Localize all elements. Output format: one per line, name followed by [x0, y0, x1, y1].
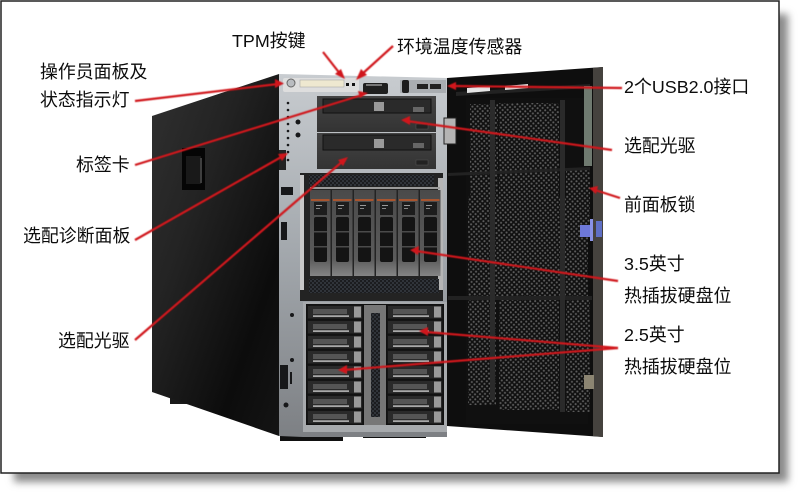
label: optional diagnostics panel: 选配诊断面板 [23, 226, 130, 246]
label: 3.5 inch hot-swap bays: 3.5英寸 [624, 254, 685, 274]
red callout arrows [135, 46, 622, 374]
label: 2.5 inch hot-swap bays: 2.5英寸 [624, 325, 685, 345]
label: 2.5 inch hot-swap bays: 热插拔硬盘位 [624, 357, 731, 377]
lower door hinge [584, 375, 594, 389]
arrow: diagnostic panel [135, 153, 288, 240]
feet [170, 392, 426, 441]
label: label card: 标签卡 [76, 155, 130, 175]
arrow: door lock [589, 186, 620, 198]
USB ports [400, 80, 446, 93]
arrow: left optical drive [135, 157, 348, 340]
side panel [152, 74, 279, 436]
arrow: ambient sensor [356, 46, 393, 80]
door hinge [444, 118, 456, 144]
silver front frame [279, 74, 447, 437]
operator panel [283, 78, 359, 92]
label card [363, 83, 388, 94]
arrow: label card [135, 91, 368, 165]
label: operator panel and status LEDs: 操作员面板及 [40, 62, 147, 82]
door connector strip [584, 86, 592, 166]
label: 3.5 inch hot-swap bays: 热插拔硬盘位 [624, 286, 731, 306]
3.5 inch drive bay [300, 173, 443, 301]
label: optional optical drive left: 选配光驱 [58, 331, 130, 351]
arrow: 2.5 inch bay lower [338, 348, 618, 374]
arrow: 3.5 inch bays [410, 246, 618, 281]
label: optional optical drive right: 选配光驱 [624, 136, 696, 156]
2.5 inch drive bay [303, 302, 447, 432]
arrow: USB ports [447, 82, 622, 90]
arrow: 2.5 inch bay upper [419, 327, 618, 348]
open front door [444, 67, 603, 437]
label: front panel lock: 前面板锁 [624, 195, 696, 215]
label: ambient temperature sensor: 环境温度传感器 [397, 37, 522, 57]
label: USB ports: 2个USB2.0接口 [624, 77, 749, 97]
label: operator panel and status LEDs: 状态指示灯 [40, 90, 130, 110]
white door labels [467, 84, 528, 93]
arrow: operator panel [135, 79, 284, 101]
arrow: TPM button [323, 52, 345, 79]
optical drive 1 [317, 96, 436, 132]
blue door latch [580, 219, 602, 241]
optical drive 2 [317, 133, 436, 169]
arrow: right optical drive [401, 116, 612, 150]
side panel handle [182, 148, 205, 190]
label: TPM button: TPM按键 [232, 31, 306, 51]
server tower photo [152, 67, 603, 441]
